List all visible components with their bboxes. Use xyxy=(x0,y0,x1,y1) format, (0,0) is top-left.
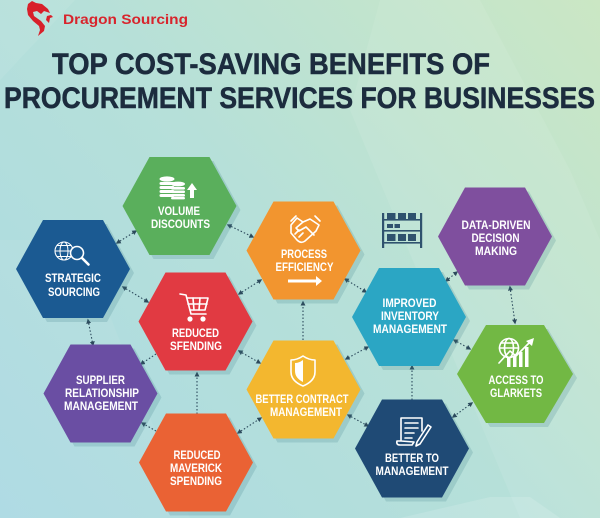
icon: handshake xyxy=(291,216,320,242)
title: TOP COST-SAVING BENEFITS OF xyxy=(52,48,490,81)
panel: data-driven decision making: DECISION xyxy=(472,232,520,245)
panel: volume discounts: VOLUME xyxy=(158,205,200,218)
panel: reduced spending xyxy=(138,272,256,374)
panel: data-driven decision making: MAKING xyxy=(475,245,517,258)
panel: better contract management: BETTER CONTRACT xyxy=(256,393,348,406)
panel: improved inventory management: IMPROVED xyxy=(382,297,436,310)
panel: supplier relationship management: SUPPLIER xyxy=(76,374,126,387)
panel: data-driven decision making xyxy=(438,188,556,290)
panel: reduced spending: REDUCED xyxy=(172,327,219,340)
panel: process efficiency: EFFICIENCY xyxy=(276,261,334,274)
panel: supplier relationship management: MANAGEMENT xyxy=(64,400,138,413)
panel: volume discounts: DISCOUNTS xyxy=(151,218,210,231)
panel: reduced maverick spending: REDUCED xyxy=(174,449,220,462)
panel: improved inventory management: INVENTORY xyxy=(381,310,439,323)
panel: process efficiency xyxy=(246,202,364,304)
panel: better to management: BETTER TO xyxy=(385,452,439,465)
panel: data-driven decision making: DATA-DRIVEN xyxy=(462,219,530,232)
connector arrows xyxy=(88,225,515,433)
panel: reduced maverick spending: MAVERICK xyxy=(170,462,223,475)
panel: strategic sourcing xyxy=(16,220,134,322)
panel: process efficiency: PROCESS xyxy=(281,248,327,261)
panel: access to markets xyxy=(457,325,577,427)
panel: better contract management xyxy=(246,340,364,442)
panel: access to markets: ACCESS TO xyxy=(488,374,544,387)
panel: volume discounts xyxy=(122,157,240,259)
panel: improved inventory management xyxy=(352,268,470,370)
panel: better to management xyxy=(355,400,473,502)
icon: right arrow xyxy=(288,276,322,286)
icon: document and pen xyxy=(397,418,431,446)
panel: reduced spending: SFENDING xyxy=(170,340,222,353)
icon: coin stacks and up arrow xyxy=(160,176,197,199)
panel: reduced maverick spending xyxy=(139,414,257,516)
panel: strategic sourcing: STRATEGIC xyxy=(45,272,102,285)
panel: better to management: MANAGEMENT xyxy=(376,465,448,478)
icon: shield xyxy=(291,356,315,386)
brand name: Dragon Sourcing xyxy=(63,12,188,27)
logo: Dragon Sourcing xyxy=(27,1,188,36)
panel: improved inventory management: MANAGEMENT xyxy=(373,323,447,336)
icon: globe with magnifier xyxy=(55,242,88,264)
panel: reduced maverick spending: SPENDING xyxy=(170,475,222,488)
icon: red dragon xyxy=(27,1,53,36)
icon: globe and growth chart xyxy=(499,338,534,367)
title xyxy=(4,48,595,115)
panel: strategic sourcing: SOURCING xyxy=(48,286,100,299)
panel: access to markets: GLARKETS xyxy=(490,387,542,400)
icon: warehouse shelf xyxy=(382,213,422,248)
panel: supplier relationship management: RELATIONSHIP xyxy=(65,387,139,400)
icon: shopping cart xyxy=(180,294,208,321)
panel: supplier relationship management xyxy=(44,344,162,446)
panel: better contract management: MANAGEMENT xyxy=(270,406,342,419)
